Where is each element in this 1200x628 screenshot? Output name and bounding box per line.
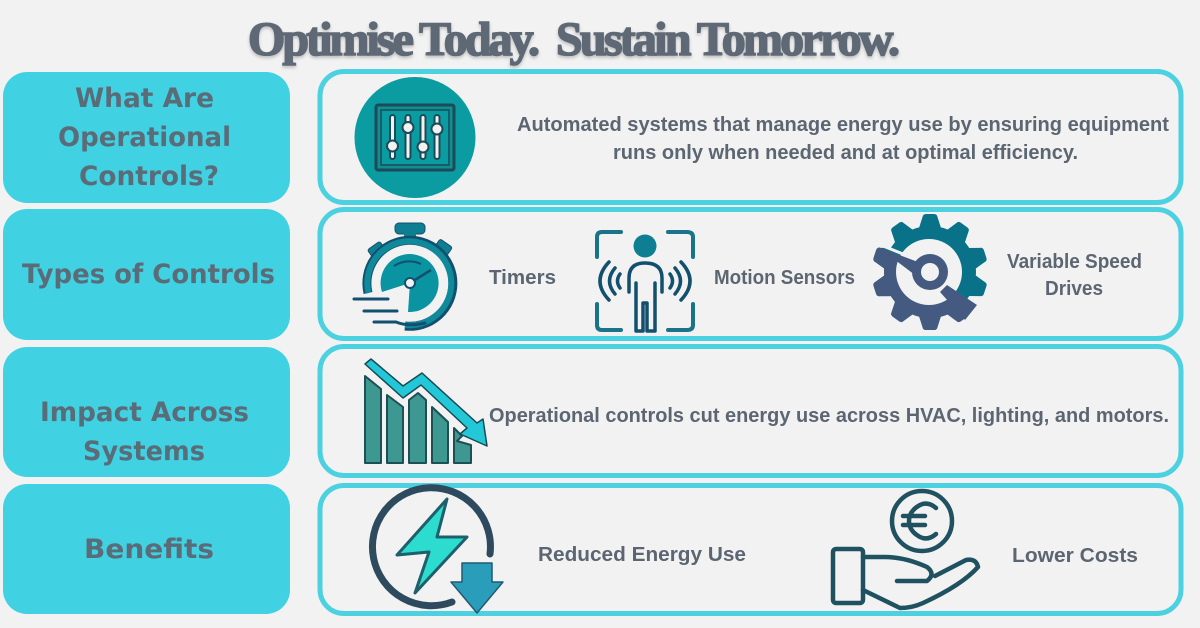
panel: benefits [320,486,1181,614]
text: variable speed drives: Variable Speed [1007,250,1142,273]
text: reduced energy use: Reduced Energy Use [538,543,746,566]
panel: benefits label [3,484,290,614]
text: definition: runs only when needed and at optimal efficiency. [613,141,1078,164]
icon: reduced energy [372,488,503,613]
panel: what are operational controls label [3,72,290,203]
panel: what are operational controls label: Controls? [79,161,219,192]
text: variable speed drives: Drives [1045,277,1103,300]
text: timers: Timers [489,266,556,289]
title: Sustain Tomorrow. [556,13,900,66]
panel: impact across systems label: Systems [83,436,205,467]
panel: types of controls label [3,209,290,340]
icon: declining bar chart with arrow [365,359,487,463]
icon: gear with wrench [871,214,989,330]
text: impact: Operational controls cut energy use across HVAC, lighting, and motors. [489,404,1169,427]
icon: control sliders [354,77,476,198]
panel: impact across systems label: Impact Across [40,397,249,428]
icon: euro coin over hand [833,491,978,608]
panel: definition [320,72,1181,202]
panel: impact across systems label [3,347,290,477]
panel: what are operational controls label: Operational [58,122,231,153]
text: variable speed drives [1007,250,1142,300]
text: lower costs: Lower Costs [1012,544,1138,567]
panel: what are operational controls label: What Are [75,83,214,114]
panel: types of controls [320,210,1181,338]
icon: stopwatch [354,223,453,326]
text: definition [517,113,1169,164]
panel: impact [320,346,1181,476]
panel: types of controls label: Types of Controls [22,259,275,290]
panel: benefits label: Benefits [84,534,214,565]
title [248,13,900,66]
text: definition: Automated systems that manage energy use by ensuring equipment [517,113,1169,136]
text: motion sensors: Motion Sensors [714,266,855,289]
icon: motion sensor person [597,232,693,331]
title: Optimise Today. [248,13,540,66]
